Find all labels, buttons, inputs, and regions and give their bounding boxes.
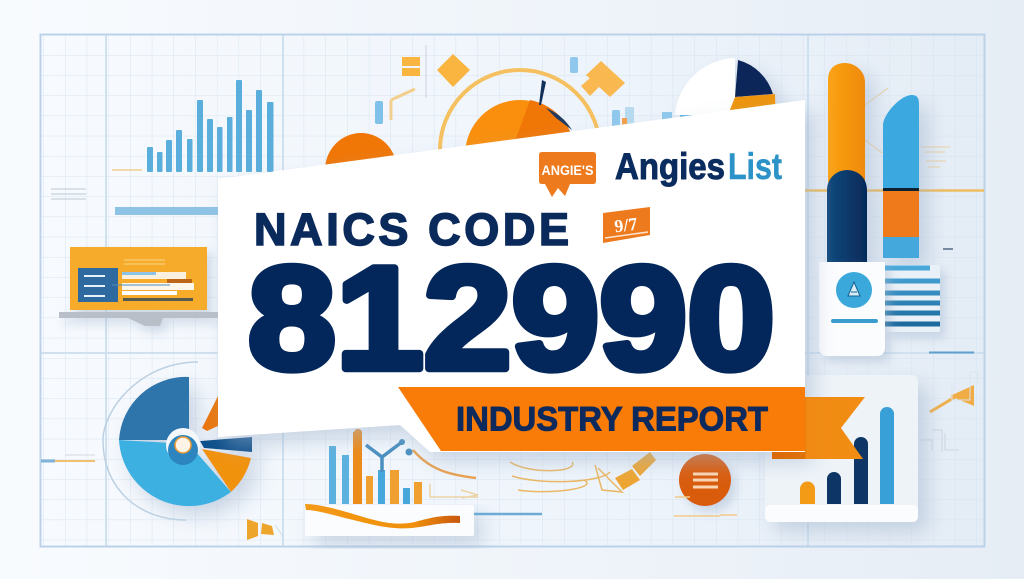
badge: 9/7 xyxy=(603,207,650,243)
icon card right xyxy=(819,262,885,356)
pie hub xyxy=(166,428,200,465)
left bar divider xyxy=(41,460,55,462)
small orange bowtie icon xyxy=(247,519,282,540)
small orange accent left xyxy=(55,455,95,461)
logo: AngiesList wordmark: Angies xyxy=(615,146,725,187)
small accent lines bottom xyxy=(674,497,737,516)
blue horizontal bar xyxy=(115,207,220,215)
logo: AngiesList wordmark: List xyxy=(728,146,782,187)
thin sketch lines right xyxy=(865,88,953,249)
pie chart left xyxy=(119,377,252,506)
orange circle menu icon xyxy=(679,454,731,506)
bar chart card xyxy=(765,375,918,522)
pie outer arc xyxy=(103,362,198,520)
heading: NAICS CODE: NAICS CODE xyxy=(254,204,569,255)
logo: Angie's speech bubble: ANGIE'S xyxy=(542,163,594,178)
badge: 9/7: 9/7 xyxy=(613,214,639,236)
yellow monitor panel xyxy=(59,247,219,326)
logo: Angie's speech bubble xyxy=(539,152,596,197)
striped panel right xyxy=(885,265,940,332)
decorative curves xyxy=(510,452,656,492)
yellow divider line right xyxy=(805,189,984,192)
main white panel xyxy=(218,100,805,452)
bottom blue accent xyxy=(474,513,542,515)
top pie chart xyxy=(675,58,776,125)
orange banner xyxy=(398,387,805,451)
ribbon tail xyxy=(772,397,865,459)
bottom center bar chart xyxy=(329,429,478,504)
gauge dial xyxy=(440,70,600,230)
small grey note lines xyxy=(51,189,86,199)
top decorative icons xyxy=(375,45,470,124)
bottom wave card xyxy=(305,504,474,536)
heading: code number: 812990 xyxy=(248,236,775,400)
right tall pill chart xyxy=(827,63,919,264)
right margin accents xyxy=(921,352,978,452)
small top icons near dial xyxy=(570,57,694,128)
orange banner: INDUSTRY REPORT xyxy=(456,400,768,438)
orange dome left xyxy=(325,133,397,207)
top-left bar chart xyxy=(112,80,274,172)
